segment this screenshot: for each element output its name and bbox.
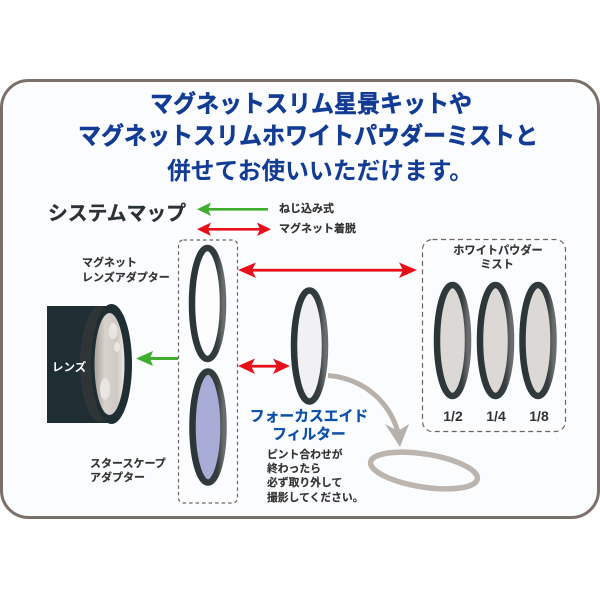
label: white powder mist: ホワイトパウダー — [453, 243, 543, 257]
icon: lens — [47, 304, 132, 424]
arrow: adapter to white powder mist — [238, 262, 417, 278]
note: remove filter: 終わったら — [267, 461, 321, 475]
label: starscape adapter: スタースケープ — [90, 457, 166, 470]
label: white powder mist: ミスト — [480, 259, 514, 271]
icon: focus aid filter — [294, 290, 325, 402]
label: mist strengths — [443, 408, 549, 424]
heading: system map: システムマップ — [48, 202, 186, 225]
label: mist strengths: 1/8 — [529, 408, 549, 424]
label: magnet lens adapter: レンズアダプター — [82, 270, 170, 284]
note: remove filter: 撮影してください。 — [267, 490, 364, 504]
label: focus aid filter: フォーカスエイド — [250, 408, 368, 425]
label: magnet lens adapter — [82, 255, 170, 284]
dashed group: adapters — [178, 240, 238, 503]
title — [78, 90, 538, 185]
legend: magnetic label: マグネット着脱 — [279, 221, 356, 235]
icon: magnet lens adapter ring — [192, 248, 223, 359]
title: 併せてお使いいただけます。 — [167, 158, 473, 185]
panel: background card — [2, 80, 598, 518]
label: mist strengths: 1/2 — [443, 408, 463, 424]
label: focus aid filter — [250, 408, 368, 443]
icon: mist filter 1/2 — [437, 285, 468, 396]
icon: removed filter ring — [368, 446, 480, 495]
arrow: adapter to lens — [136, 351, 178, 366]
legend: screw-in label: ねじ込み式 — [279, 201, 334, 215]
label: magnet lens adapter: マグネット — [82, 255, 137, 269]
arrow: remove filter — [328, 376, 409, 447]
legend: magnetic arrow — [197, 222, 271, 236]
dashed group: white powder mist — [422, 240, 566, 432]
label: mist strengths: 1/4 — [486, 408, 506, 424]
label: starscape adapter: アダプター — [90, 470, 145, 484]
icon: starscape adapter filter — [192, 372, 224, 482]
note: remove filter — [267, 447, 364, 504]
label: focus aid filter: フィルター — [272, 426, 346, 443]
icon: mist filter 1/8 — [522, 285, 554, 396]
legend: screw-in arrow — [197, 202, 268, 216]
icon: mist filter 1/4 — [480, 285, 511, 396]
title: マグネットスリムホワイトパウダーミストと — [78, 122, 538, 150]
note: remove filter: 必ず取り外して — [267, 475, 342, 489]
note: remove filter: ピント合わせが — [267, 447, 343, 461]
label: white powder mist — [453, 243, 543, 271]
label: lens: レンズ — [52, 360, 87, 374]
label: starscape adapter — [90, 457, 166, 484]
arrow: adapter to focus aid — [238, 358, 290, 374]
title: マグネットスリム星景キットや — [150, 90, 472, 118]
